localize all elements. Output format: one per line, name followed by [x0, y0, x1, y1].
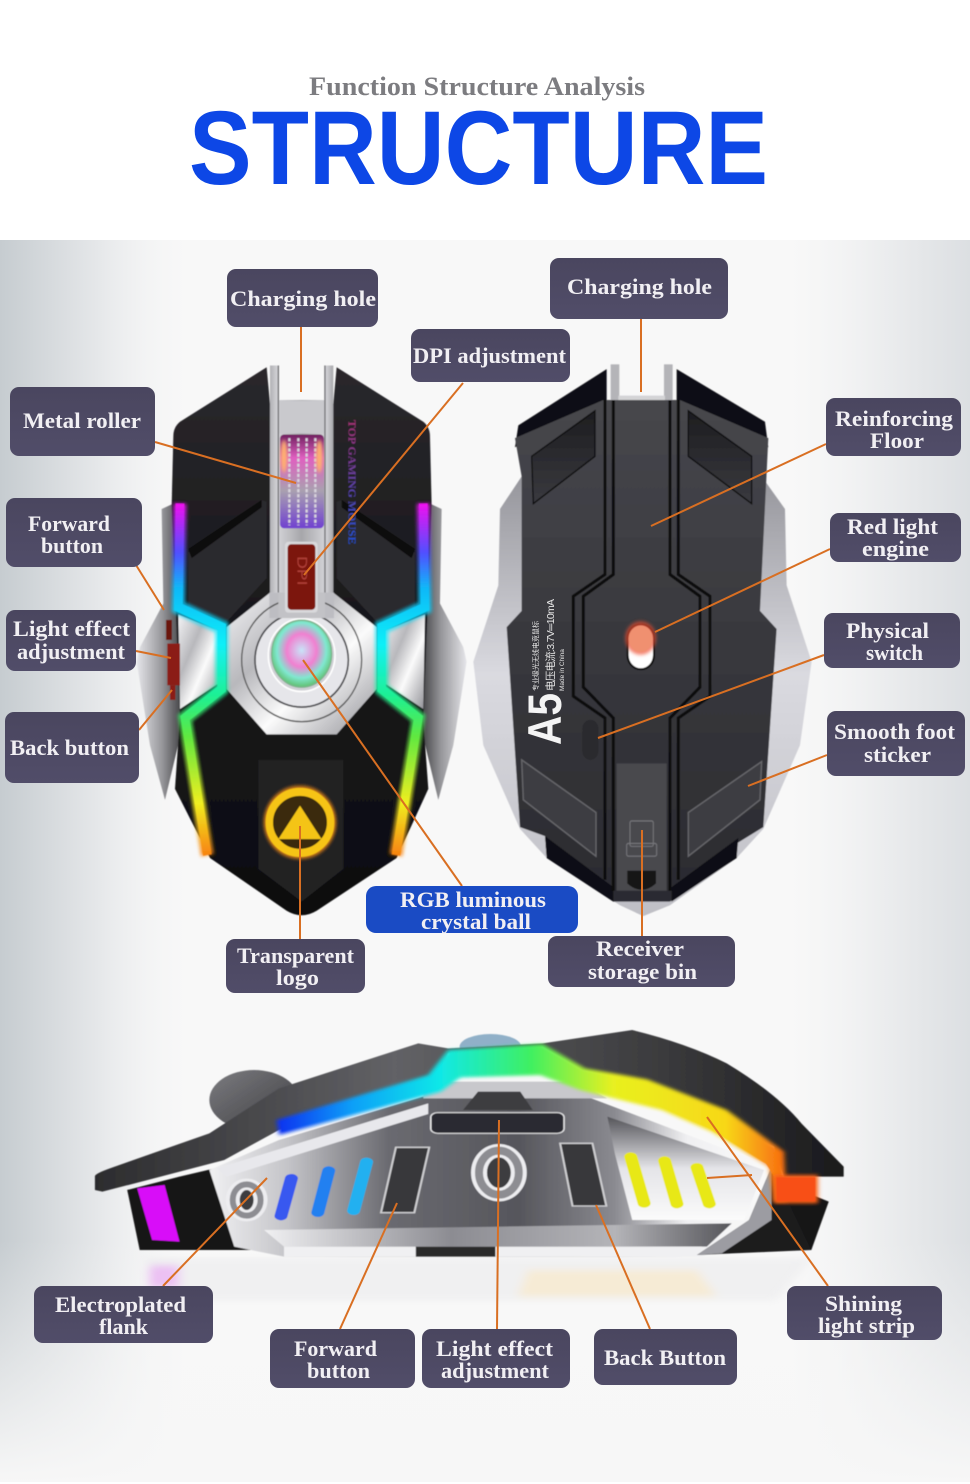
- DPI button: DPI: [294, 556, 309, 585]
- label: Shining light strip: Shining: [825, 1291, 903, 1316]
- label: Light effect adjustment (side view): [422, 1329, 570, 1388]
- label: Light effect adjustment (side view): Light effect: [436, 1336, 554, 1361]
- side buttons: [166, 620, 180, 700]
- label: Light effect adjustment: Light effect: [13, 616, 131, 641]
- label: Forward button: Forward: [28, 511, 110, 536]
- label: Back button: Back button: [10, 735, 129, 760]
- button facets: [188, 500, 415, 902]
- red light engine: [625, 621, 656, 670]
- label: Back button: [5, 712, 139, 783]
- label: Back Button (side view): [594, 1329, 737, 1385]
- lower black body: [127, 1153, 829, 1250]
- label: Physical switch: Physical: [846, 618, 929, 643]
- silver lower sides: [178, 614, 425, 709]
- label: Physical switch: [824, 613, 960, 668]
- label: Charging hole (top view): Charging hole: [230, 286, 376, 311]
- label: Forward button: button: [41, 533, 103, 558]
- label: Transparent logo: logo: [276, 965, 319, 990]
- label: Smooth foot sticker: Smooth foot: [834, 719, 956, 744]
- product spec text: Made in China: [559, 649, 566, 691]
- label: Transparent logo: [226, 939, 365, 993]
- label: RGB luminous crystal ball: [366, 886, 578, 934]
- label: Receiver storage bin: Receiver: [596, 936, 684, 961]
- label: Reinforcing Floor: Reinforcing: [835, 406, 954, 431]
- top shell: [95, 1030, 844, 1192]
- label: Metal roller: Metal roller: [23, 408, 141, 433]
- foot stickers: [522, 411, 762, 856]
- label: Physical switch: switch: [866, 640, 923, 665]
- product spec text: 专业级光无线电竞鼠标: [531, 621, 540, 691]
- label: Electroplated flank: [34, 1286, 213, 1343]
- label: RGB luminous crystal ball: RGB luminous: [400, 887, 546, 912]
- crystal ball top: [460, 1034, 521, 1059]
- scroll wheel: [209, 1070, 299, 1130]
- label: DPI adjustment: DPI adjustment: [413, 343, 566, 368]
- black lower ends: [545, 836, 738, 902]
- magenta light: [127, 1182, 194, 1247]
- label: Transparent logo: Transparent: [237, 943, 354, 968]
- light effect button: [431, 1092, 564, 1133]
- crystal ball: [272, 620, 332, 687]
- receiver storage bin: [617, 763, 667, 891]
- label: Charging hole (bottom view): [550, 258, 728, 319]
- RGB strips: [178, 504, 425, 855]
- label: Light effect adjustment: adjustment: [17, 639, 125, 664]
- black shell: [172, 367, 432, 915]
- DPI button: [285, 542, 318, 613]
- black upper ends: [515, 369, 768, 447]
- label: Receiver storage bin: storage bin: [588, 959, 697, 984]
- label: Red light engine: engine: [862, 536, 929, 561]
- rails: [611, 364, 673, 404]
- label: Red light engine: Red light: [847, 514, 939, 539]
- metal plate: [209, 1095, 772, 1257]
- reflection: [145, 1258, 811, 1300]
- physical switch: [582, 720, 598, 760]
- product spec text: 电压电流:3.7V═10mA: [544, 599, 557, 691]
- lower chrome bar: [264, 1167, 811, 1257]
- metal roller: [280, 435, 324, 528]
- label: Charging hole (bottom view): Charging hole: [567, 274, 712, 299]
- silver hub: [227, 593, 377, 734]
- label: RGB luminous crystal ball: crystal ball: [421, 909, 531, 934]
- A5 model mark: A5: [518, 693, 571, 745]
- label: Red light engine: [830, 513, 961, 562]
- orange rear light: [774, 1175, 818, 1203]
- product spec text: [531, 599, 566, 691]
- grooves: [573, 400, 710, 891]
- top gaming mouse text: TOP GAMING MOUSE: [346, 420, 357, 544]
- silver wing body: [473, 476, 812, 916]
- label: Forward button: [6, 498, 142, 567]
- RGB side strip: [277, 1044, 786, 1202]
- label: Receiver storage bin: [548, 936, 735, 987]
- label: DPI adjustment: [411, 329, 570, 382]
- label: Shining light strip: [787, 1286, 942, 1340]
- label: Forward button (side view): Forward: [294, 1336, 377, 1361]
- mouse bottom view: [473, 364, 812, 916]
- label: Electroplated flank: flank: [99, 1314, 148, 1339]
- silver dials: [228, 1145, 525, 1220]
- label: Charging hole (top view): [227, 269, 378, 327]
- chrome highlights: [217, 1082, 764, 1220]
- label: Light effect adjustment: [6, 610, 136, 671]
- side wings: [137, 504, 467, 800]
- label: Smooth foot sticker: sticker: [864, 742, 931, 767]
- mouse side view: [95, 1030, 844, 1300]
- label: Light effect adjustment (side view): adjustment: [441, 1358, 549, 1383]
- label: Smooth foot sticker: [827, 711, 965, 776]
- label: Metal roller: [10, 387, 155, 456]
- label: Forward button (side view): button: [307, 1358, 370, 1383]
- subtitle: Function Structure Analysis: [309, 72, 645, 101]
- label: Electroplated flank: Electroplated: [55, 1292, 186, 1317]
- transparent logo: [269, 792, 331, 853]
- label: Forward button (side view): [270, 1329, 415, 1388]
- label: Reinforcing Floor: Floor: [870, 428, 924, 453]
- label: Reinforcing Floor: [826, 398, 961, 456]
- label: Back Button (side view): Back Button: [604, 1345, 726, 1370]
- mouse top view: [137, 365, 467, 915]
- side buttons: [381, 1143, 606, 1213]
- title: STRUCTURE: [189, 90, 768, 207]
- dark base plate: [507, 400, 777, 902]
- callout lines: [136, 319, 830, 1329]
- light bars: [281, 1157, 709, 1216]
- label: Shining light strip: light strip: [818, 1313, 915, 1338]
- centre rails: [270, 365, 333, 614]
